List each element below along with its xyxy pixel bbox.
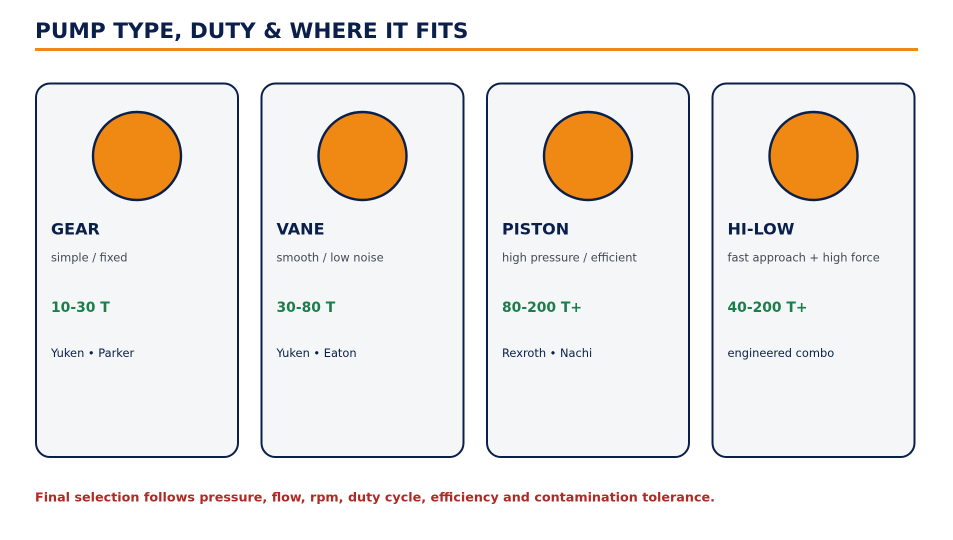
- footer note: Final selection follows pressure, flow, rpm, duty cycle, efficiency and contamination tolerance.: [35, 490, 715, 504]
- panel: hi-low: 40-200 T+: [728, 300, 808, 316]
- panel: hi-low: [712, 84, 914, 457]
- title: PUMP TYPE, DUTY & WHERE IT FITS: [35, 19, 468, 44]
- panel: hi-low: fast approach + high force: [728, 250, 880, 264]
- panel: vane: Yuken • Eaton: [276, 346, 357, 360]
- panel: piston: 80-200 T+: [502, 300, 582, 316]
- title underline: [35, 48, 918, 51]
- panel: gear: 10-30 T: [51, 300, 110, 316]
- panel: piston: PISTON: [502, 220, 569, 238]
- panel: piston: Rexroth • Nachi: [502, 346, 592, 360]
- panel: piston: high pressure / efficient: [502, 250, 637, 264]
- panel: vane: [262, 84, 464, 457]
- panel: piston: [487, 84, 689, 457]
- panel: hi-low: engineered combo: [728, 346, 834, 360]
- panel: gear: [36, 84, 238, 457]
- panel: vane: VANE: [276, 220, 324, 238]
- panel: gear: simple / fixed: [51, 250, 127, 264]
- panel: gear: GEAR: [51, 220, 100, 238]
- panel: vane: 30-80 T: [276, 300, 336, 316]
- panel: vane: smooth / low noise: [276, 250, 384, 264]
- panel: gear: Yuken • Parker: [50, 346, 134, 360]
- panel: hi-low: HI-LOW: [728, 220, 795, 238]
